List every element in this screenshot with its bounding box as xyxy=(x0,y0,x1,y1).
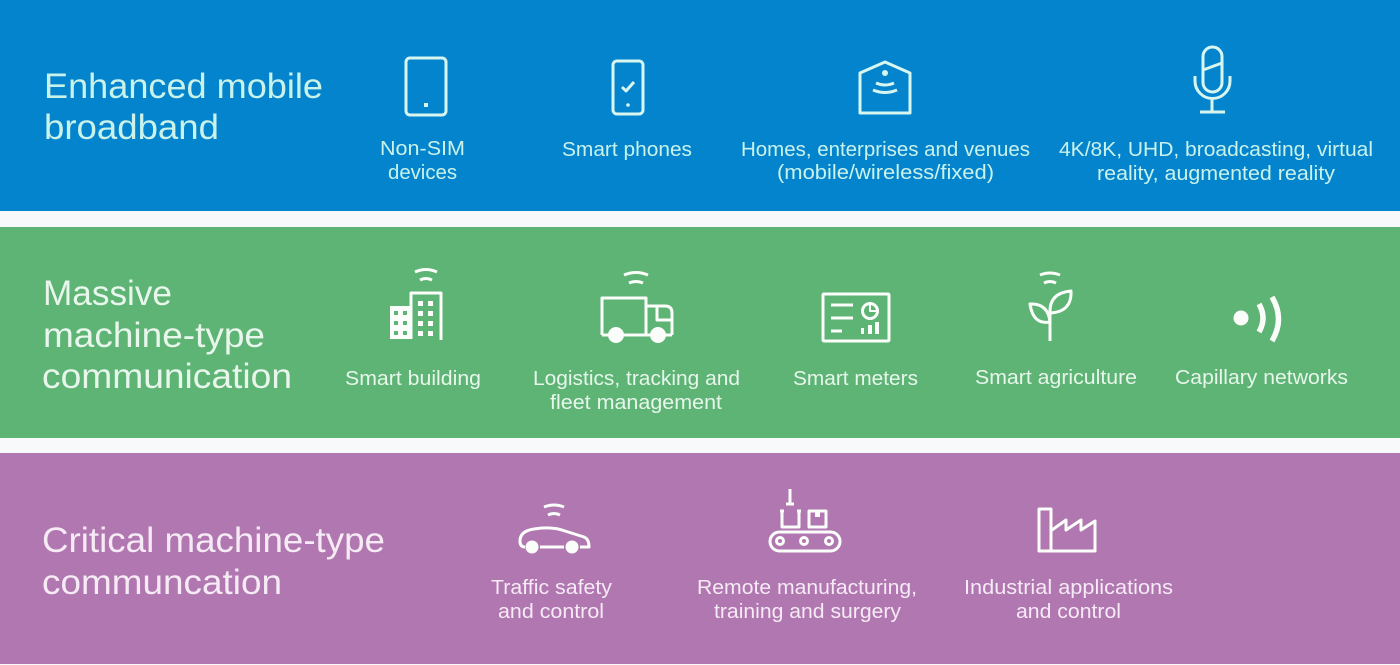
icon: house with wireless signal xyxy=(860,62,910,113)
label: smart meters: Smart meters xyxy=(793,367,918,390)
icon: remote manufacturing conveyor xyxy=(770,489,840,551)
icon: factory xyxy=(1039,509,1095,551)
heading: enhanced mobile broadband: Enhanced mobile xyxy=(44,67,323,106)
label: homes, enterprises and venues xyxy=(741,138,1030,184)
label: smart building: Smart building xyxy=(345,367,481,390)
label: 4K/8K, UHD, broadcasting, virtual reality, augmented reality: 4K/8K, UHD, broadcasting, virtual xyxy=(1059,138,1373,161)
heading: massive machine-type communication: communication xyxy=(42,357,292,396)
panel: enhanced mobile broadband xyxy=(0,0,1400,211)
label: remote manufacturing, training and surgery xyxy=(697,576,917,623)
heading: massive machine-type communication: Massive xyxy=(43,274,172,313)
label: traffic safety and control: Traffic safety xyxy=(491,576,613,599)
icon: smart agriculture plant xyxy=(1030,273,1071,341)
panel: massive machine-type communication xyxy=(0,227,1400,438)
label: traffic safety and control xyxy=(491,576,613,623)
label: smart agriculture: Smart agriculture xyxy=(975,366,1137,389)
label: 4K/8K, UHD, broadcasting, virtual reality, augmented reality xyxy=(1059,138,1373,185)
icon: smart building xyxy=(390,270,441,340)
heading: enhanced mobile broadband: broadband xyxy=(44,108,219,147)
label: non-SIM devices: Non-SIM xyxy=(380,137,465,160)
label: industrial applications and control: and control xyxy=(1016,600,1121,623)
label: non-SIM devices: devices xyxy=(388,161,457,184)
heading: enhanced mobile broadband xyxy=(44,67,323,147)
label: homes, enterprises and venues: Homes, enterprises and venues xyxy=(741,138,1030,161)
icon: tablet xyxy=(406,58,446,115)
heading: massive machine-type communication: machine-type xyxy=(43,316,265,355)
label: industrial applications and control: Industrial applications xyxy=(964,576,1173,599)
label: traffic safety and control: and control xyxy=(498,600,604,623)
heading: massive machine-type communication xyxy=(42,274,292,396)
label: logistics, tracking and fleet management: fleet management xyxy=(550,391,722,414)
label: industrial applications and control xyxy=(964,576,1173,623)
heading: critical machine-type communcation xyxy=(42,521,385,602)
label: non-SIM devices xyxy=(380,137,465,184)
icon: microphone xyxy=(1195,47,1230,112)
label: 4K/8K, UHD, broadcasting, virtual reality, augmented reality: reality, augmented reality xyxy=(1097,162,1336,185)
icon: logistics truck xyxy=(602,272,672,343)
label: capillary networks: Capillary networks xyxy=(1175,366,1348,389)
icon: connected car xyxy=(520,505,589,554)
label: smart phones: Smart phones xyxy=(562,138,692,161)
heading: critical machine-type communcation: Critical machine-type xyxy=(42,521,385,560)
panel: critical machine-type communication xyxy=(0,453,1400,664)
label: remote manufacturing, training and surgery: Remote manufacturing, xyxy=(697,576,917,599)
label: logistics, tracking and fleet management: Logistics, tracking and xyxy=(533,367,740,390)
label: logistics, tracking and fleet management xyxy=(533,367,740,414)
label: remote manufacturing, training and surgery: training and surgery xyxy=(714,600,902,623)
icon: smart phone xyxy=(613,61,643,114)
heading: critical machine-type communcation: communcation xyxy=(42,563,282,602)
icon: smart meter xyxy=(823,294,889,341)
icon: capillary network signal xyxy=(1234,297,1278,341)
label: homes, enterprises and venues: (mobile/wireless/fixed) xyxy=(777,161,994,184)
